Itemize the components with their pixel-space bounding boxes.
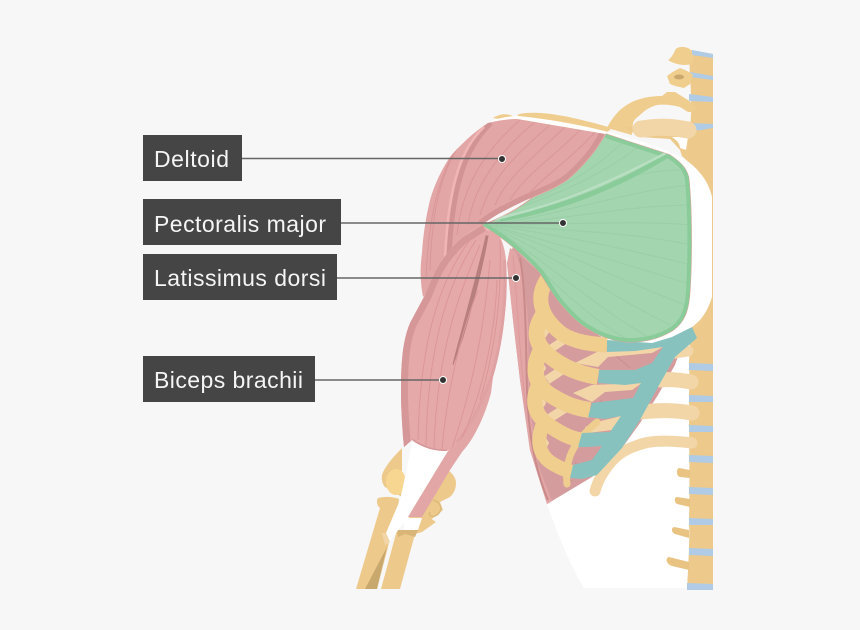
lower biceps band: [408, 377, 493, 517]
humerus epicondyles: [382, 448, 402, 497]
white crescent around pectoral: [498, 116, 712, 330]
spine and vertebrae: [667, 47, 713, 590]
label: Latissimus dorsi: Latissimus dorsi: [154, 265, 326, 291]
trochlea: [386, 469, 406, 495]
upper sternum bone: [632, 128, 713, 163]
intervertebral discs: [687, 50, 713, 590]
label: Deltoid: Deltoid: [154, 146, 229, 172]
latissimus dorsi: [507, 247, 682, 504]
ulna: [381, 518, 436, 589]
lower sternum bone: [689, 344, 690, 363]
small gap: [672, 137, 688, 150]
label: Biceps brachii: [143, 356, 446, 402]
back ribs: [547, 336, 692, 491]
label: Latissimus dorsi: [143, 254, 520, 300]
arm bones: [356, 448, 456, 589]
label: Pectoralis major: [143, 199, 566, 245]
first rib and clavicle arc: [607, 92, 697, 135]
pectoralis major: [482, 134, 692, 342]
label: Pectoralis major: Pectoralis major: [154, 211, 326, 237]
radius: [356, 497, 399, 589]
acromion and shoulder bone: [493, 113, 612, 134]
biceps brachii: [401, 225, 507, 451]
label: Deltoid: [143, 135, 506, 181]
label: Biceps brachii: Biceps brachii: [154, 367, 303, 393]
fifth back rib end: [567, 422, 597, 484]
costal cartilage: [570, 327, 697, 479]
pale upper rib: [641, 127, 688, 130]
biceps tendon: [382, 460, 442, 545]
torso silhouette: [547, 330, 713, 588]
spinous processes: [667, 468, 690, 570]
anatomical illustration: [356, 47, 713, 590]
deltoid: [421, 119, 605, 297]
front ribs: [535, 278, 607, 472]
